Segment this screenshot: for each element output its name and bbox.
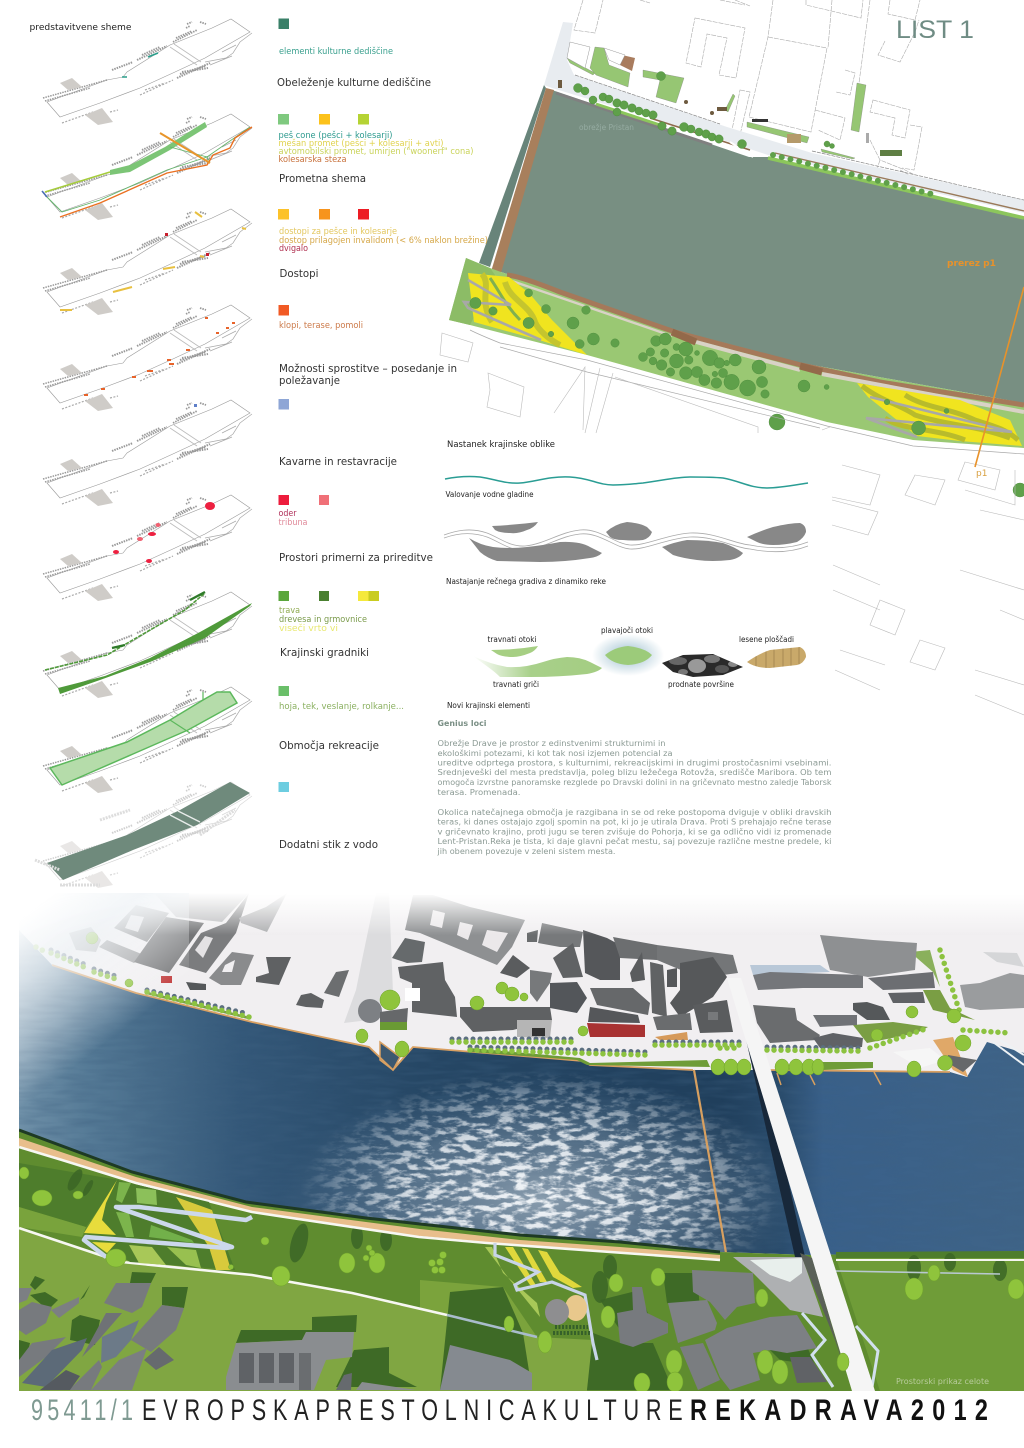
west terrace aerial [84, 1180, 252, 1270]
sheet number: LIST 1 [896, 16, 974, 44]
text block: Genius loci [436, 719, 832, 856]
legend: cultural heritage [278, 18, 393, 56]
legend: cafes swatch [278, 399, 289, 410]
legend: recreation: hoja, tek, veslanje, rolkanje... [279, 701, 404, 711]
legend: landscape [278, 591, 379, 633]
scheme 6: events [43, 495, 252, 601]
central terrace and path [485, 1243, 597, 1360]
diagram: water wave [445, 476, 808, 488]
text block: Genius loci: v gričevnato krajino, proti jugu se teren zvišuje do Pohorja, ki se ga odlično vidi iz promenade [438, 826, 832, 836]
legend: access: dvigalo [279, 243, 308, 253]
heading: Obeleženje: Obeleženje kulturne dediščine [277, 77, 431, 89]
north land [96, 915, 1024, 1077]
site plan [440, 0, 1024, 715]
legend: access [278, 209, 488, 253]
project code: 95411/1 [31, 1392, 133, 1427]
sand strip [19, 1138, 720, 1259]
south park [449, 258, 1024, 448]
render caption: Prostorski prikaz celote [896, 1377, 989, 1386]
trees south [19, 1167, 1024, 1393]
text block: Genius loci: Genius loci [438, 719, 487, 728]
water [19, 930, 1024, 1255]
north promenade [52, 965, 1024, 1077]
scheme 3: access [43, 209, 252, 315]
text block: Genius loci: Obrežje Drave je prostor z edinstvenimi strukturnimi in [438, 739, 666, 748]
scheme 5: cafes [43, 400, 252, 506]
legend: landscape: trava [279, 605, 300, 615]
west terrace [464, 273, 587, 355]
title: EVROPSKAPRESTOLNICAKULTURE [142, 1392, 683, 1427]
scheme 4: relaxation [43, 305, 252, 411]
diagram: new landscape elements: travnati griči [493, 680, 539, 689]
text block: Genius loci: ureditve odprtega prostora, s kulturnimi, rekreacijskimi in drugimi prostočasnimi vsebinami. [438, 758, 832, 768]
tree shadows [65, 1167, 1007, 1303]
text block: Genius loci: terasa. Promenada. [438, 788, 520, 797]
diagram: new landscape elements [473, 626, 806, 689]
diagram: new landscape elements: travnati otoki [488, 635, 536, 644]
text block: Genius loci: Srednjeveški del mesta predstavlja, poleg blizu ležečega Rotovža, središče Maribora. Ob tem [438, 767, 832, 777]
north bank [556, 75, 1024, 218]
aerial render [19, 893, 1024, 1393]
scheme 8: recreation [43, 687, 252, 793]
heading: Možnosti sprostitve [279, 363, 457, 387]
section line [975, 287, 1024, 467]
text block: Genius loci: ekološkimi potezami, ki kot tak nosi izjemen potencial za [438, 748, 673, 758]
plaza and blue paths [733, 1257, 878, 1387]
south road [470, 330, 1024, 454]
legend: relaxation [278, 305, 363, 330]
title bold: REKADRAVA2012 [690, 1393, 988, 1427]
legend: relaxation: klopi, terase, pomoli [279, 320, 363, 330]
building shadows south [19, 1272, 815, 1390]
heading: Dostopi: Dostopi [280, 268, 318, 280]
diagram: new landscape elements: prodnate površine [668, 680, 734, 689]
text block: Genius loci: teras, ki danes ostajajo zgolj spomin na pot, ki jo je utirala Drava. Proti S prehajajo rečne terase [438, 816, 832, 826]
heading: Prostori: Prostori primerni za prireditve [279, 552, 433, 564]
north tree rows [36, 947, 1010, 1055]
text block: Genius loci: omogoča izvrstne panoramske rezglede po Dravski dolini in na gričevnato mestno zaledje Taborsk [438, 777, 832, 787]
north greens [380, 950, 975, 1043]
bridge [746, 1042, 875, 1391]
diagram: sediment shapes [444, 522, 808, 562]
west brown promenade [490, 88, 554, 275]
caption: new elements: Novi krajinski elementi [447, 701, 530, 710]
text block: Genius loci: Lent-Pristan.Reka je tista, ki daje glavni pečat mestu, saj povezuje različne mestne predele, ki [438, 836, 832, 846]
east terrace [857, 383, 1022, 446]
heading: Kavarne: Kavarne in restavracije [279, 456, 397, 468]
south buildings [440, 333, 1024, 715]
legend: landscape: viseči vrto vi [279, 623, 338, 633]
paved hatch [344, 893, 393, 1023]
white panel behind diagrams [440, 434, 832, 874]
caption: wave: Valovanje vodne gladine [446, 490, 534, 499]
fades [118, 893, 1024, 933]
legend: traffic: peš cone (pešci + kolesarji) [278, 130, 392, 140]
text block: Genius loci: Okolica natečajnega območja je razgibana in se od reke postopoma dviguje v obliki dravskih [438, 807, 832, 817]
legend: traffic: avtomobilski promet, umirjen ("woonerf" cona) [278, 146, 474, 156]
small site furniture [558, 80, 902, 156]
south buildings [19, 1270, 827, 1390]
label: p1: p1 [976, 469, 987, 479]
heading: Prometna shema: Prometna shema [279, 173, 366, 185]
south land base [19, 1132, 880, 1391]
pale blocks [604, 48, 625, 65]
north tree row [773, 155, 932, 194]
legend: events [278, 495, 329, 527]
park trees [470, 289, 1024, 497]
diagram: new landscape elements: plavajoči otoki [601, 626, 653, 635]
heading: Območja: Območja rekreacije [279, 740, 379, 752]
heading: schemes: predstavitvene sheme [30, 23, 132, 33]
legend: access: dostopi za pešce in kolesarje [279, 226, 397, 236]
north road [544, 22, 1024, 213]
legend: events: oder [278, 508, 297, 518]
west dark strip [479, 85, 546, 267]
legend: landscape: drevesa in grmovnice [279, 614, 367, 624]
heading: Nastanek: Nastanek krajinske oblike [447, 440, 555, 450]
scheme 2: traffic [42, 114, 252, 220]
green patches [567, 47, 866, 159]
north trees [574, 72, 834, 148]
building outlines north [574, 0, 922, 180]
north buildings [69, 893, 1024, 1072]
legend: recreation [278, 686, 404, 711]
scheme 9: water contact [35, 782, 252, 888]
lawn shades [19, 1163, 1024, 1391]
legend: events: tribuna [278, 517, 308, 527]
legend: cultural heritage: elementi kulturne dediščine [279, 46, 393, 56]
water ripples [19, 1036, 978, 1252]
legend: access: dostop prilagojen invalidom (< 6% naklon brežine) [279, 235, 488, 245]
legend: water swatch [278, 782, 289, 792]
legend: traffic: mešan promet (pešci + kolesarji + avti) [278, 138, 444, 148]
heading: Možnosti sprostitve: poležavanje [279, 375, 340, 387]
piers [777, 1072, 881, 1085]
legend: traffic [278, 114, 474, 164]
label: prerez p1: prerez p1 [947, 259, 996, 269]
text block: Genius loci: jih obenem povezuje v zeleni sistem mesta. [436, 847, 616, 856]
scheme 1: cultural heritage [43, 19, 252, 125]
brown terrace [620, 55, 635, 71]
legend: traffic: kolesarska steza [278, 154, 346, 164]
heading: Krajinski gradniki: Krajinski gradniki [280, 647, 369, 659]
trees north [86, 932, 971, 1077]
white paths south [19, 1147, 720, 1315]
heading: Dodatni stik: Dodatni stik z vodo [279, 839, 378, 851]
wooden footbridge [694, 1070, 726, 1253]
diagram: new landscape elements: lesene ploščadi [739, 635, 794, 644]
heading: Možnosti sprostitve: Možnosti sprostitve – posedanje in [279, 363, 457, 375]
caption: sediment: Nastajanje rečnega gradiva z dinamiko reke [446, 577, 606, 586]
river [501, 90, 1024, 403]
dark bank edge [19, 1130, 720, 1252]
label: obrežje Pristan: obrežje Pristan [579, 123, 634, 132]
scheme 7: landscape [43, 592, 252, 698]
west lawn panel [449, 258, 495, 325]
south bank [507, 275, 1024, 412]
